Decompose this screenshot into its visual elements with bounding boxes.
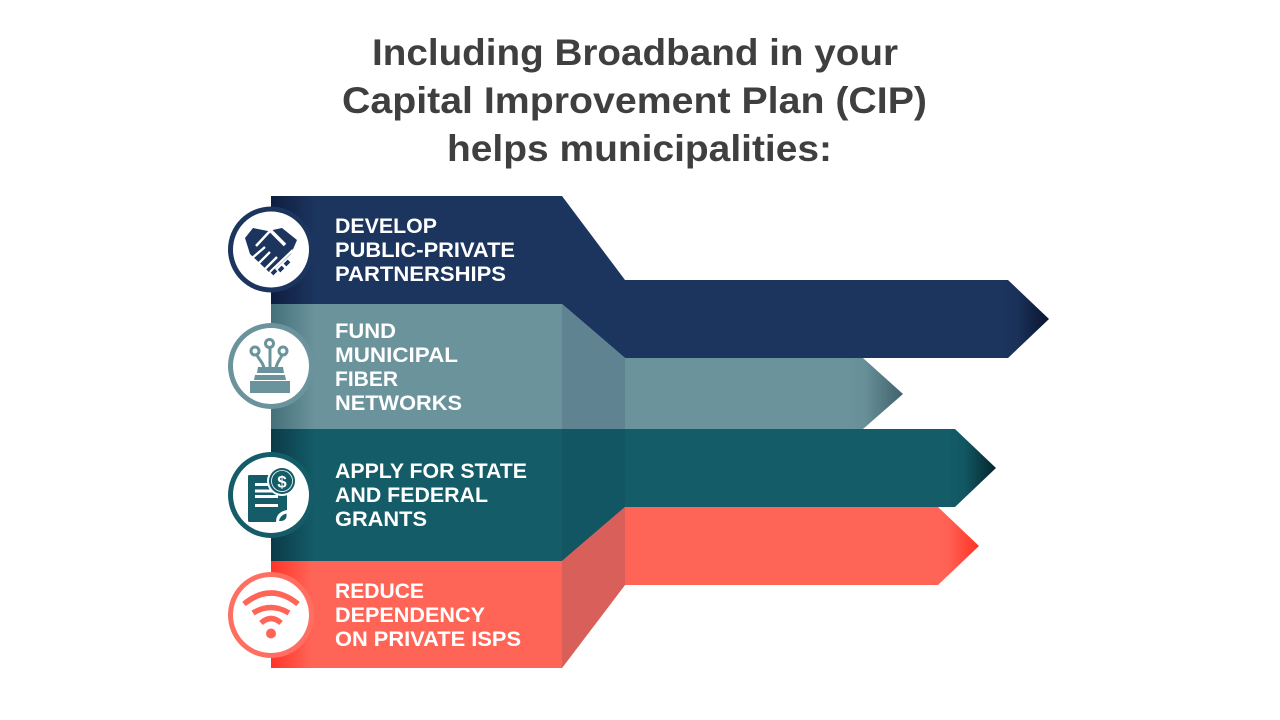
dark teal arrow band [271, 429, 996, 561]
title: Capital Improvement Plan (CIP) [342, 79, 927, 121]
label: apply for state and federal grants: APPLY FOR STATE [335, 460, 527, 483]
icon: wifi [228, 572, 314, 658]
label: develop public-private partnerships: DEVELOP [335, 215, 437, 238]
label: reduce dependency on private isps: ON PRIVATE ISPS [335, 628, 521, 651]
label: fund municipal fiber networks [335, 320, 462, 415]
coral arrow band [271, 507, 979, 668]
icon: handshake [228, 206, 314, 292]
label: develop public-private partnerships: PUBLIC-PRIVATE [335, 239, 515, 262]
title [342, 31, 927, 169]
slate teal arrow band [271, 304, 903, 429]
label: reduce dependency on private isps [335, 580, 521, 651]
label: fund municipal fiber networks: MUNICIPAL [335, 344, 458, 367]
label: reduce dependency on private isps: REDUCE [335, 580, 424, 603]
panel: apply for state and federal grants [228, 429, 996, 561]
label: apply for state and federal grants: AND FEDERAL [335, 484, 488, 507]
title: helps municipalities: [447, 127, 832, 169]
icon: grant document with dollar coin [228, 452, 314, 538]
panel: develop public-private partnerships [228, 196, 1049, 358]
label: develop public-private partnerships [335, 215, 515, 286]
label: fund municipal fiber networks: NETWORKS [335, 392, 462, 415]
label: fund municipal fiber networks: FIBER [335, 368, 398, 391]
navy arrow band [271, 196, 1049, 358]
label: apply for state and federal grants [335, 460, 527, 531]
icon: fiber optic [228, 323, 314, 409]
label: apply for state and federal grants: GRANTS [335, 508, 427, 531]
label: develop public-private partnerships: PARTNERSHIPS [335, 263, 506, 286]
panel: fund municipal fiber networks [228, 304, 903, 429]
icon: grant document with dollar coin: $ [277, 472, 287, 492]
title: Including Broadband in your [372, 31, 898, 73]
label: reduce dependency on private isps: DEPENDENCY [335, 604, 485, 627]
panel: reduce dependency on private isps [228, 507, 979, 668]
label: fund municipal fiber networks: FUND [335, 320, 396, 343]
